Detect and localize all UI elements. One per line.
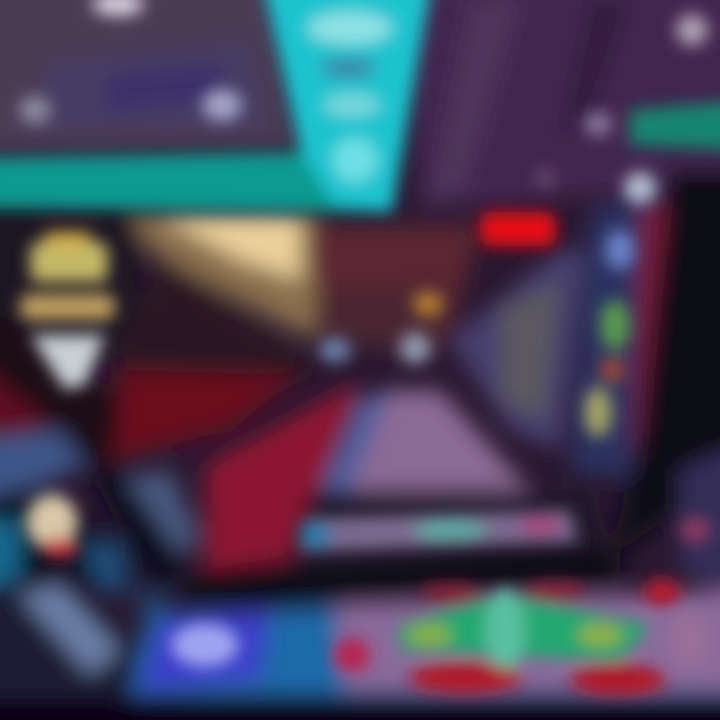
red sign [480, 212, 556, 246]
black counter under aisle [170, 550, 620, 605]
white floor glow [171, 623, 239, 667]
left yellow machine [30, 242, 108, 282]
left lower seats [0, 430, 85, 500]
colored floor mosaic [400, 595, 650, 660]
red carpet aisle [205, 385, 360, 570]
aisle floor [325, 390, 530, 490]
back wall [130, 215, 320, 340]
right machine glow [680, 517, 710, 543]
left glowing button [26, 494, 78, 550]
orange lamp [413, 291, 443, 317]
dark triangular machine [110, 260, 320, 440]
lower left [0, 570, 150, 700]
floor [130, 590, 720, 695]
dark right pillar [610, 170, 720, 560]
teal marquee band [0, 150, 390, 212]
slot column lights [624, 172, 656, 204]
counter strip lights [300, 510, 578, 552]
left wall band [0, 205, 140, 355]
green sign [630, 100, 720, 150]
ceiling left panel [0, 0, 300, 155]
cyan sign strip [262, 0, 432, 212]
red floor shapes [409, 663, 521, 693]
ceiling lights [92, 0, 144, 16]
glows [319, 337, 351, 363]
ceiling right [400, 0, 720, 210]
slot machine bank [450, 250, 585, 450]
